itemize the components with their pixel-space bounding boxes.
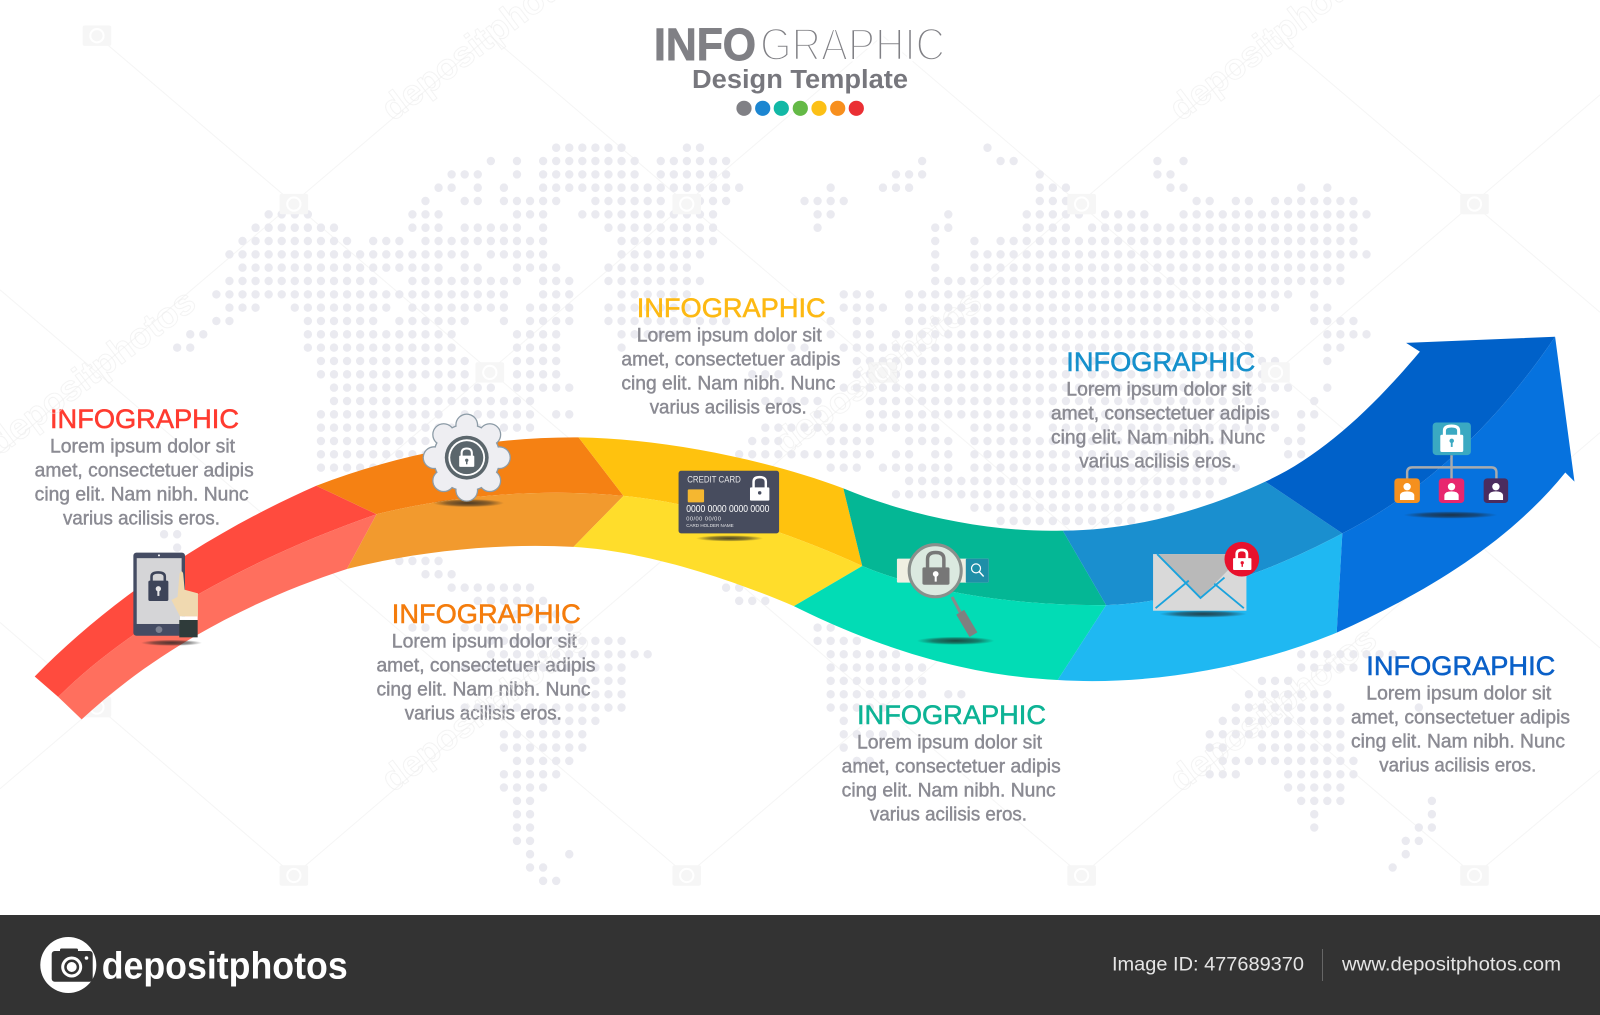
heading: INFOGRAPHIC [637,293,826,323]
body text: cing elit. Nam nibh. Nunc [1051,428,1265,449]
body text: Lorem ipsum dolor sit [392,632,577,653]
body text: varius acilisis eros. [1079,452,1236,473]
logo wordmark: depositphotos [102,945,348,987]
diagonal watermark text: depositphotos [1161,617,1384,799]
title block [654,19,945,116]
ribbon arrow [35,337,1574,719]
heading: INFOGRAPHIC [857,700,1046,730]
icons [133,415,1508,646]
segment 2: orange [316,437,623,569]
icon: credit card: 0000 0000 0000 0000 [686,504,770,515]
body text: cing elit. Nam nibh. Nunc [35,485,249,506]
icon: organisation chart with lock [1394,422,1508,519]
body text: Lorem ipsum dolor sit [857,733,1043,754]
body text [1051,380,1270,473]
segment 4: green [794,488,1106,680]
body text: cing elit. Nam nibh. Nunc [621,374,836,395]
body text: Lorem ipsum dolor sit [1066,380,1252,401]
text block 3: yellow [621,293,840,418]
body text: Lorem ipsum dolor sit [637,326,822,347]
heading: INFOGRAPHIC [1066,347,1255,377]
image id: Image ID: 477689370 [1112,954,1304,976]
icon: magnifier with lock [897,545,994,645]
diagonal watermark text [0,0,1384,799]
body text [35,437,254,530]
body text: cing elit. Nam nibh. Nunc [1351,732,1565,753]
background camera watermarks [83,26,1489,886]
title: INFOGRAPHIC: GRAPHIC [760,19,945,70]
body text: amet, consectetuer adipis [842,757,1061,778]
diagonal watermark text: depositphotos [766,280,989,462]
body text: amet, consectetuer adipis [1051,404,1270,425]
body text: amet, consectetuer adipis [35,461,254,482]
body text [376,632,596,725]
icon: credit card [679,471,779,541]
icon: tablet with hand [133,553,202,646]
body text: varius acilisis eros. [63,509,220,530]
text block 1: red [35,404,254,530]
diagonal watermark text: depositphotos [373,617,596,799]
body text: amet, consectetuer adipis [376,656,595,677]
body text: varius acilisis eros. [405,704,562,725]
card label: CREDIT CARD [687,475,741,485]
body text: Lorem ipsum dolor sit [50,437,236,458]
footer bar [0,915,1600,1015]
colour dots row [736,101,864,116]
icon: camera logo [40,937,96,993]
dotted world map [164,148,1433,881]
segment 3: yellow [573,437,862,606]
segment 1: red [35,486,377,719]
body text: amet, consectetuer adipis [1351,708,1570,729]
body text: cing elit. Nam nibh. Nunc [842,781,1056,802]
heading: INFOGRAPHIC [50,404,239,434]
body text [621,326,840,418]
segment 6: blue arrow head [1265,337,1574,633]
icon: gear with lock [424,415,510,507]
body text [1351,684,1570,777]
text block 6: blue [1351,651,1570,777]
body text: varius acilisis eros. [870,805,1027,826]
text block 2: orange [376,599,596,725]
body text: cing elit. Nam nibh. Nunc [376,680,591,701]
segment 5: light blue [1058,482,1342,681]
heading: INFOGRAPHIC [392,599,581,629]
subtitle: Design Template [692,66,908,94]
icon: envelope with lock badge [1153,542,1259,618]
text block 5: light blue [1051,347,1270,473]
icon: credit card: 00/00 00/00 [686,516,721,522]
body text: varius acilisis eros. [650,398,807,419]
icon: credit card: CARD HOLDER NAME [686,523,734,528]
body text: Lorem ipsum dolor sit [1366,684,1552,705]
body text: amet, consectetuer adipis [621,350,840,371]
title: INFOGRAPHIC: INFO [654,19,756,70]
title: INFOGRAPHIC [654,19,945,70]
body text: varius acilisis eros. [1379,756,1536,777]
website: www.depositphotos.com [1341,954,1561,976]
body text [842,733,1061,826]
text block 4: green [842,700,1061,826]
heading: INFOGRAPHIC [1366,651,1555,681]
